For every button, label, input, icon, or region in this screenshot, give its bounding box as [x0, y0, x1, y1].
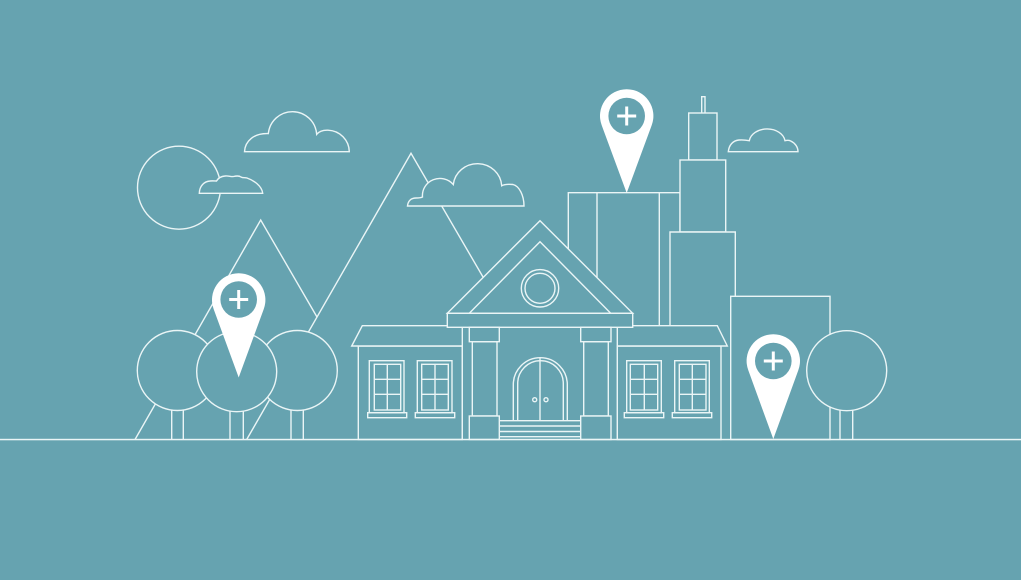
- building: block column lines: [597, 193, 659, 330]
- window 3: [624, 361, 664, 418]
- wing: right wall: [617, 346, 721, 440]
- pin: right: [747, 334, 800, 439]
- mountain: large centre: [247, 153, 483, 440]
- mountain: small left: [135, 220, 317, 440]
- house: [352, 221, 727, 440]
- building: right block: [731, 296, 830, 440]
- window 4: [672, 361, 712, 418]
- window 2: [415, 361, 455, 418]
- window 1: [368, 361, 407, 418]
- pin: left: [212, 273, 265, 378]
- wing: left wall: [358, 346, 462, 440]
- column: left: [469, 327, 499, 440]
- pediment: round window: [521, 270, 559, 307]
- tower: upper tier: [680, 160, 726, 232]
- building: wide block: [568, 193, 680, 330]
- tree: right of group: [257, 330, 337, 440]
- column: right: [581, 327, 611, 440]
- icon: sun: [138, 146, 220, 229]
- cloud: right: [728, 129, 798, 152]
- cloud: centre: [408, 164, 524, 206]
- tower: antenna: [702, 97, 705, 113]
- entablature: [447, 313, 633, 327]
- portico side lines: [462, 327, 617, 440]
- tower: base tier: [670, 232, 735, 330]
- cloud: small over sun: [199, 176, 263, 193]
- pediment: inner: [469, 242, 611, 313]
- roof: left wing: [352, 326, 470, 346]
- steps: [499, 421, 581, 437]
- tower: top tier: [689, 113, 717, 160]
- tree: left: [137, 330, 217, 440]
- tree: far right: [807, 331, 887, 440]
- pediment: outer: [447, 221, 633, 313]
- pin: top: [600, 89, 653, 193]
- portico fill: [463, 327, 617, 439]
- ground line: [0, 439, 1021, 440]
- cloud: top left: [244, 112, 349, 152]
- roof: right wing: [610, 326, 727, 346]
- city skyline: [568, 97, 830, 439]
- tree: middle: [197, 332, 277, 440]
- door: [513, 358, 567, 421]
